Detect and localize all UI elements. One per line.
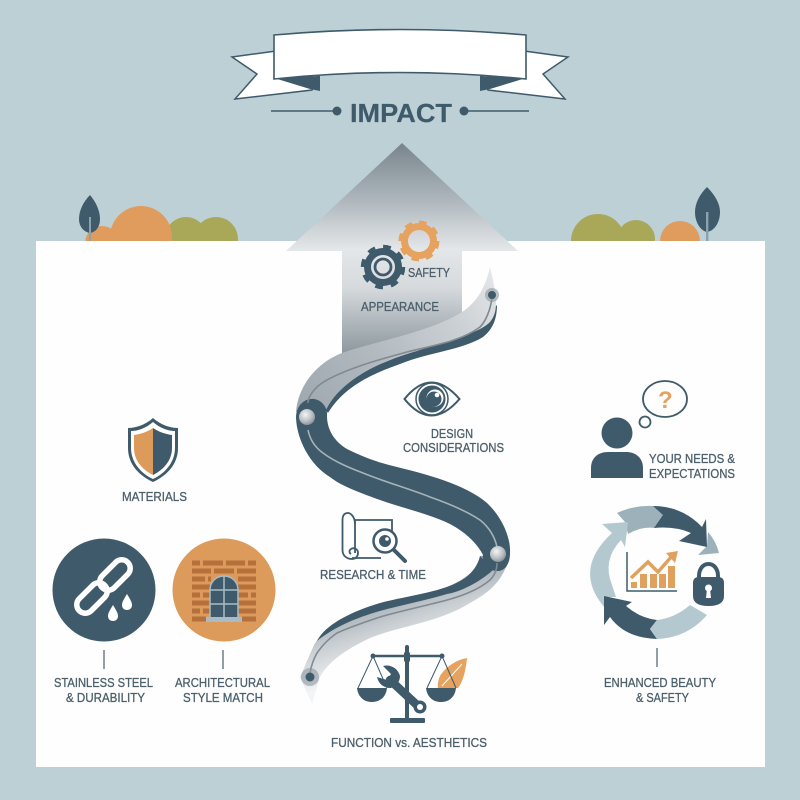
ribbon: central dark section: [296, 399, 510, 571]
heading: IMPACT: IMPACT: [350, 98, 452, 128]
label: research and time: RESEARCH & TIME: [320, 567, 426, 582]
arrow segment: dark bottom left: [604, 596, 657, 639]
icon: circular arrows: [590, 506, 724, 639]
label: stainless steel and durability: STAINLESS STEEL: [54, 675, 153, 690]
arrow segment: grey top: [617, 506, 664, 534]
large metal arrow: [286, 143, 518, 360]
icon: scroll with magnifier: [342, 513, 405, 561]
label: design considerations: DESIGN: [431, 426, 473, 441]
right landscape: bushes and tree: [571, 187, 720, 268]
icon: gears: [363, 222, 438, 287]
ribbon: upper dark edge: [322, 305, 497, 413]
label: design considerations: CONSIDERATIONS: [403, 440, 504, 455]
label: architectural style match: ARCHITECTURAL: [175, 675, 270, 690]
connector: stainless steel: [103, 650, 105, 669]
left landscape: tree and bushes: [79, 195, 238, 268]
icon: rising chart: [627, 551, 678, 591]
S-curve ribbon: [296, 267, 510, 704]
label: materials: MATERIALS: [122, 489, 187, 504]
ribbon: upper silver section: [296, 267, 496, 412]
label: enhanced beauty and safety: [604, 675, 716, 705]
label: your needs and expectations: EXPECTATIONS: [649, 466, 735, 481]
label: enhanced beauty and safety: ENHANCED BEAUTY: [604, 675, 716, 690]
icon: eye: [404, 382, 460, 416]
icon: brick wall and window in circle: [172, 538, 276, 642]
arrow segment: grey tail right: [698, 532, 719, 555]
ribbon: lower dark edge: [317, 556, 493, 641]
white content panel: [36, 241, 765, 767]
leaf: [438, 658, 467, 690]
arrow segment: light left: [590, 522, 628, 608]
label: design considerations: [403, 426, 504, 455]
ribbon: thin centre lines: [308, 298, 497, 673]
label: stainless steel and durability: & DURABILITY: [66, 690, 145, 705]
label: your needs and expectations: [649, 451, 735, 481]
label: function vs aesthetics: FUNCTION vs. AESTHETICS: [331, 735, 487, 750]
icon: scales with wrench and leaf: [357, 645, 467, 723]
label: architectural style match: STYLE MATCH: [183, 690, 263, 705]
label: architectural style match: [175, 675, 270, 705]
icon: person with question bubble: ?: [658, 387, 673, 414]
icon: shield: [128, 418, 178, 482]
ribbon: lower silver section: [300, 553, 510, 704]
arrow segment: light bottom: [650, 605, 707, 639]
rivets: [299, 409, 315, 425]
arrow segment: dark top right: [653, 506, 707, 547]
label: safety: SAFETY: [408, 265, 450, 280]
label: appearance: APPEARANCE: [361, 299, 439, 314]
wrench: [390, 680, 418, 706]
icon: padlock: [693, 564, 724, 606]
connector: enhanced beauty: [656, 648, 658, 667]
title banner: [232, 30, 568, 99]
heading: IMPACT: [271, 98, 529, 128]
connector: architectural style: [222, 650, 224, 669]
label: stainless steel and durability: [54, 675, 153, 705]
icon: person with question bubble: [591, 381, 687, 478]
icon: chain and drops in circle: [52, 538, 156, 642]
label: your needs and expectations: YOUR NEEDS &: [649, 451, 735, 466]
label: enhanced beauty and safety: & SAFETY: [636, 690, 689, 705]
